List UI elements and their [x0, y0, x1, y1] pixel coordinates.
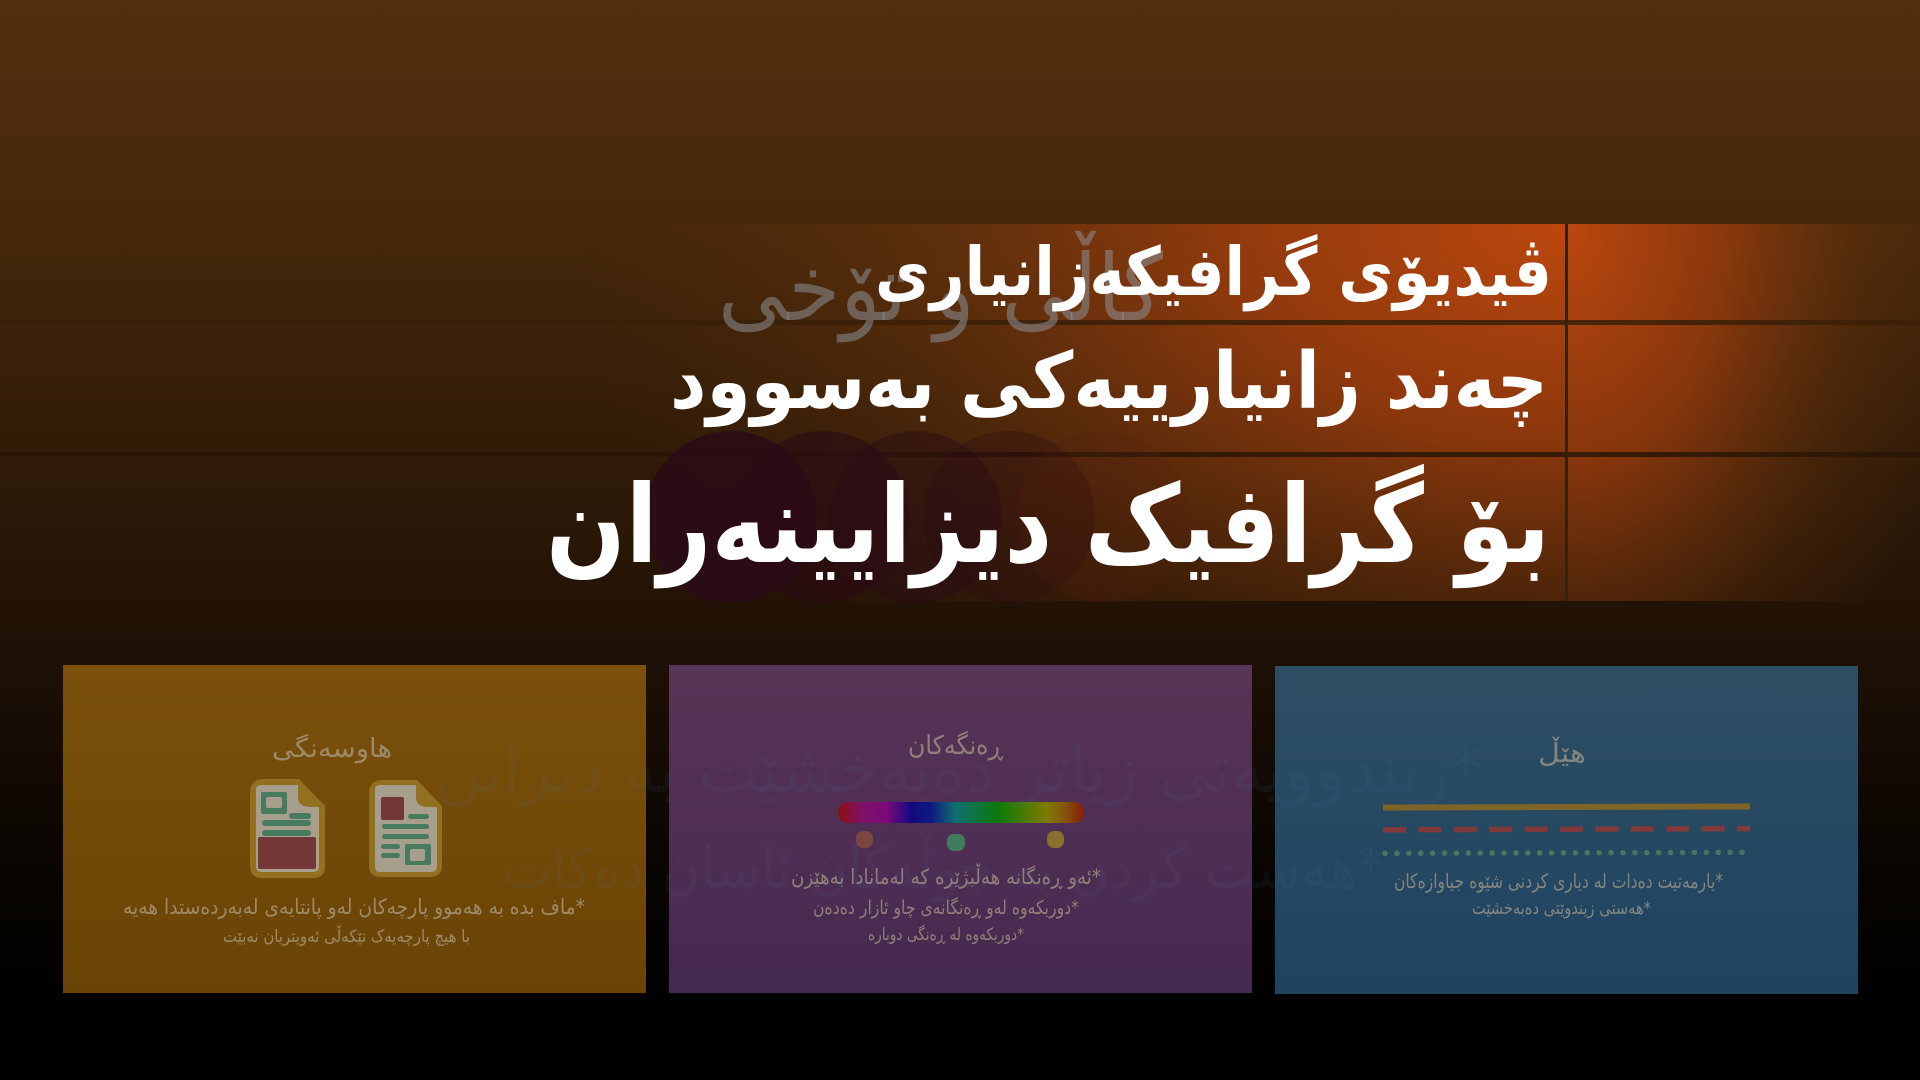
colours heading: ڕەنگەکان [908, 730, 1004, 761]
panel: colours [669, 665, 1252, 993]
overlapping dark circles [645, 431, 1188, 603]
dotted line sample [1385, 852, 1745, 853]
colours text: *دوربکەوە لەو ڕەنگانەی چاو ئازار دەدەن [813, 896, 1079, 919]
ghost paragraph: *هەست کردن بە جوڵەکان ئاسان دەکات [502, 831, 1384, 903]
panel: balance [63, 665, 646, 993]
ghost heading: light and dark: کاڵی و تۆخی [718, 230, 1163, 343]
icon: layout document two [369, 780, 442, 877]
colour swatches [856, 831, 1064, 851]
dashed line sample [1383, 829, 1750, 830]
rainbow bar [838, 802, 1084, 823]
title: چەند زانیارییەکی بەسوود [670, 337, 1548, 427]
line text: *یارمەتیت دەدات لە دیاری کردنی شێوە جیاوازەکان [1394, 869, 1723, 893]
colours text [791, 863, 1101, 945]
line text [1394, 869, 1723, 919]
line text: *هەستی زیندوێتی دەبەخشێت [1472, 898, 1651, 919]
balance heading: هاوسەنگی [272, 733, 392, 764]
colours text: *ئەو ڕەنگانە هەڵبژێرە کە لەمانادا بەهێزن [791, 863, 1101, 889]
colours text: *دوربکەوە لە ڕەنگی دوبارە [868, 924, 1024, 945]
balance text [123, 895, 585, 947]
title [546, 233, 1552, 589]
solid line sample [1383, 806, 1750, 808]
ghost paragraph: *زیندوویەتی زیاتر دەبەخشێت بە دیزاین [435, 731, 1482, 808]
title: ڤیدیۆی گرافیکەزانیاری [875, 233, 1552, 312]
balance text: با هیچ پارچەیەک تێکەڵی ئەویتریان نەبێت [223, 925, 470, 947]
balance text: *ماف بدە بە هەموو پارچەکان لەو پانتایەی لەبەردەستدا هەیە [123, 895, 585, 919]
title band with orange glow [0, 224, 1920, 601]
title: بۆ گرافیک دیزایینەران [546, 463, 1550, 589]
line heading: هێڵ [1538, 737, 1586, 769]
panel: line [1275, 666, 1858, 994]
ghost paragraph [435, 731, 1482, 903]
icon: layout document one [250, 779, 325, 878]
